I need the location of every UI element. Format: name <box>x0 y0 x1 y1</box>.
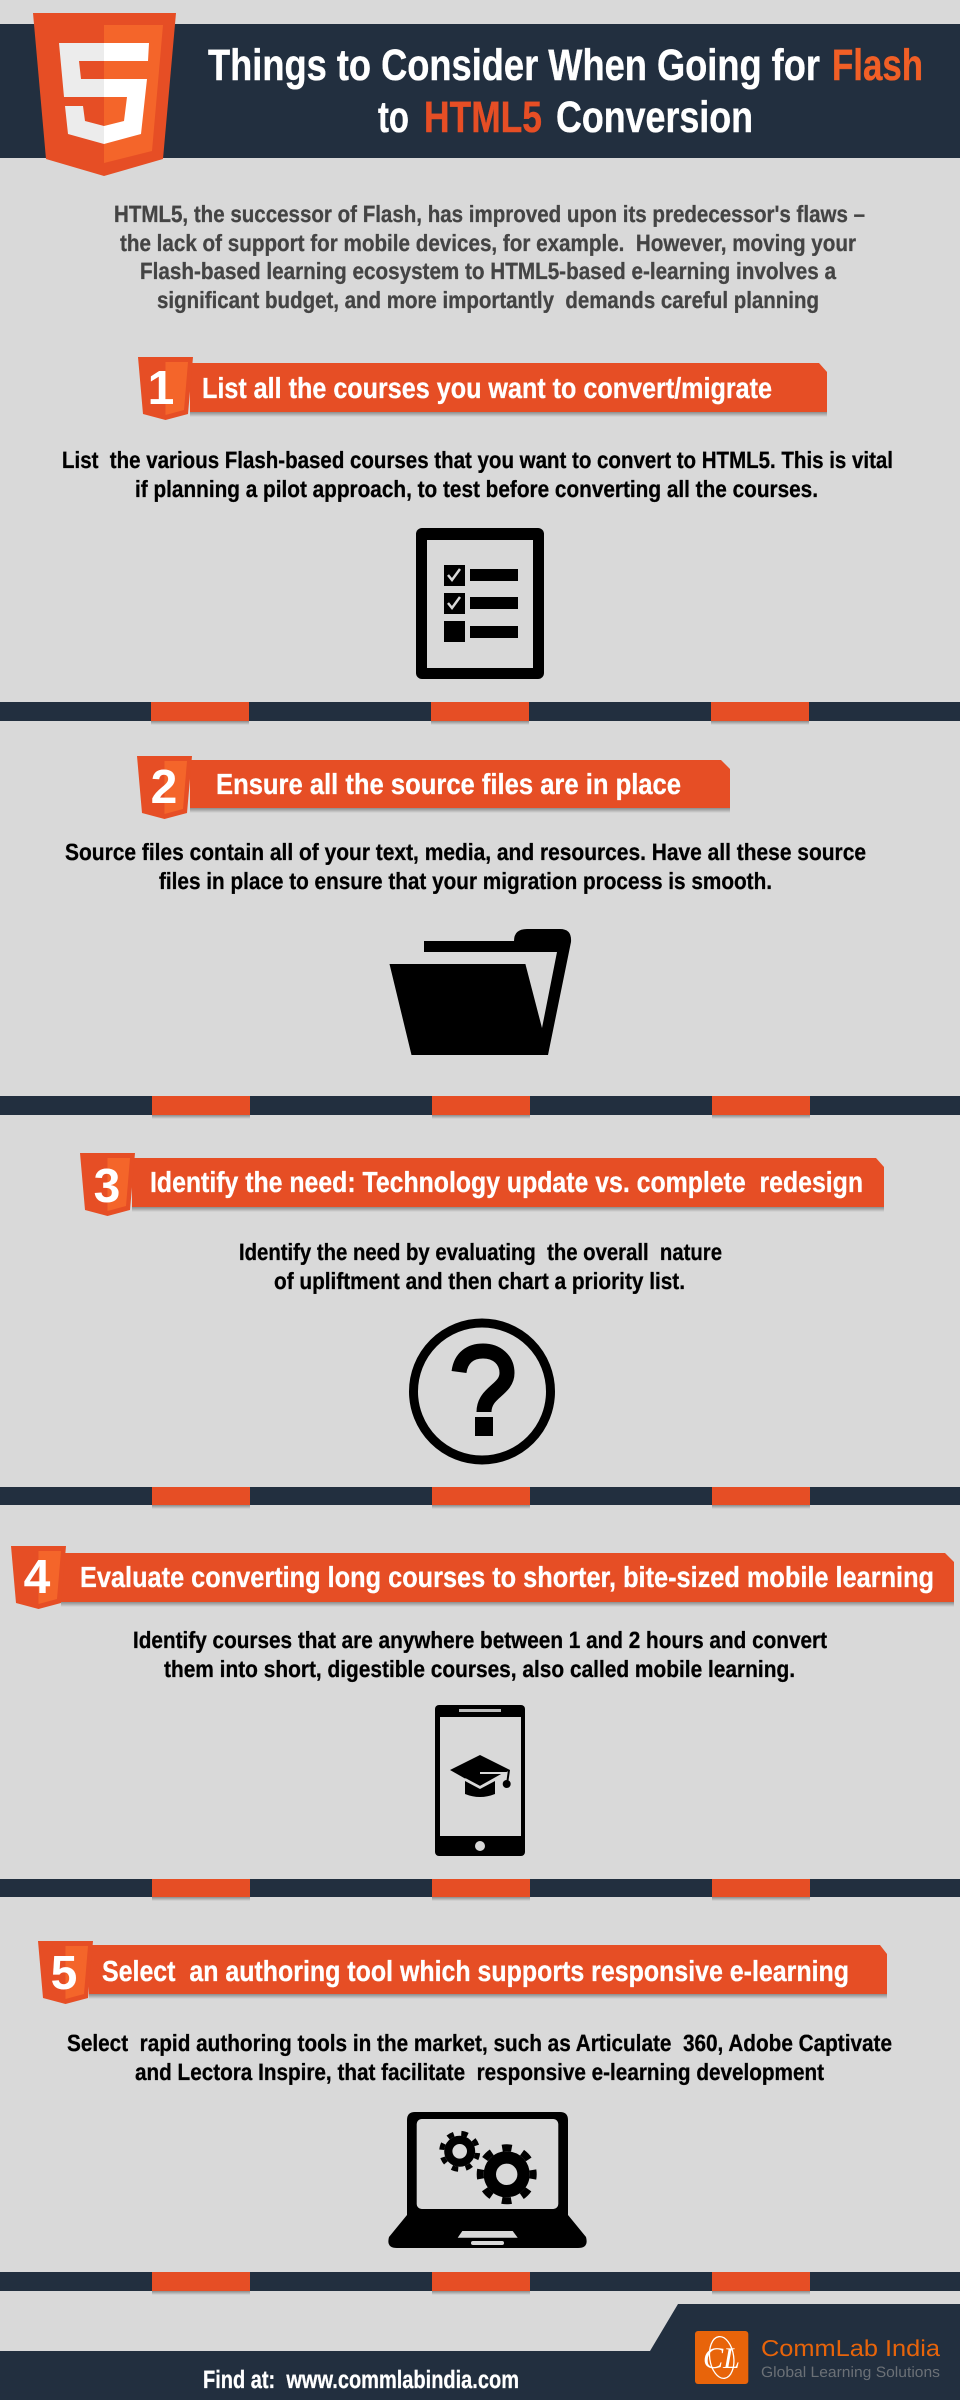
section 2 body text: files in place to ensure that your migration process is smooth. <box>159 868 772 894</box>
section 3 body text: of upliftment and then chart a priority list. <box>274 1268 685 1294</box>
header band <box>0 24 960 158</box>
number shield 2 <box>137 756 192 819</box>
section 2 body text <box>65 839 866 894</box>
section 5 body text: and Lectora Inspire, that facilitate responsive e-learning development <box>135 2059 824 2085</box>
footer band <box>0 2304 960 2400</box>
number shield 5: 5 <box>51 1947 77 2000</box>
title: Things to Consider When Going for <box>208 41 820 90</box>
icon: folder <box>390 929 571 1055</box>
section 4 body text: them into short, digestible courses, also called mobile learning. <box>164 1656 795 1682</box>
divider bar 4 <box>0 1879 960 1901</box>
divider bar 5 <box>0 2272 960 2295</box>
number shield 1 <box>138 357 193 420</box>
title <box>208 41 923 142</box>
CommLab India logo: CommLab India <box>761 2335 940 2361</box>
intro text <box>114 201 865 313</box>
number shield 5 <box>38 1941 93 2004</box>
title: Flash <box>832 41 923 90</box>
section 1 body text <box>62 447 893 502</box>
number shield 3: 3 <box>94 1160 120 1213</box>
number shield 4 <box>11 1546 66 1609</box>
section 5 body text <box>67 2030 892 2085</box>
intro text: HTML5, the successor of Flash, has improved upon its predecessor's flaws – <box>114 201 865 227</box>
CommLab India logo <box>695 2331 940 2384</box>
section 2 banner <box>190 760 730 813</box>
heading 2: Ensure all the source files are in place <box>216 769 681 801</box>
divider bar 3 <box>0 1487 960 1509</box>
intro text: the lack of support for mobile devices, for example. However, moving your <box>120 230 856 256</box>
icon: laptop with gears <box>388 2112 587 2248</box>
icon: mobile phone with graduation cap <box>435 1705 525 1856</box>
number shield 1: 1 <box>148 362 174 415</box>
section 5 banner <box>89 1945 887 1999</box>
title: Conversion <box>556 93 753 142</box>
section 1 banner <box>190 363 827 417</box>
section 3 body text: Identify the need by evaluating the overall nature <box>239 1239 722 1265</box>
title: to <box>378 93 409 142</box>
icon: HTML5 shield <box>33 13 176 176</box>
CommLab India logo: CL <box>703 2342 740 2375</box>
section 1 body text: if planning a pilot approach, to test before converting all the courses. <box>135 476 818 502</box>
heading 3: Identify the need: Technology update vs. complete redesign <box>150 1167 863 1199</box>
icon: question mark <box>414 1323 550 1460</box>
section 3 body text <box>239 1239 722 1294</box>
intro text: Flash-based learning ecosystem to HTML5-based e-learning involves a <box>140 258 837 284</box>
heading 1: List all the courses you want to convert/migrate <box>202 373 772 405</box>
divider bar 2 <box>0 1096 960 1119</box>
section 4 body text <box>133 1627 827 1682</box>
number shield 2: 2 <box>151 761 177 814</box>
number shield 4: 4 <box>24 1551 51 1604</box>
divider bar 1 <box>0 702 960 725</box>
number shield 3 <box>80 1153 135 1216</box>
section 4 banner <box>61 1553 954 1607</box>
intro text: significant budget, and more importantly demands careful planning <box>157 287 819 313</box>
section 4 body text: Identify courses that are anywhere between 1 and 2 hours and convert <box>133 1627 827 1653</box>
icon: checklist <box>416 528 544 679</box>
footer link text: Find at: www.commlabindia.com <box>203 2366 519 2394</box>
heading 5: Select an authoring tool which supports responsive e-learning <box>102 1956 849 1988</box>
CommLab India logo: Global Learning Solutions <box>761 2364 940 2381</box>
section 3 banner <box>132 1158 884 1212</box>
title: HTML5 <box>424 93 542 142</box>
section 2 body text: Source files contain all of your text, media, and resources. Have all these source <box>65 839 866 865</box>
